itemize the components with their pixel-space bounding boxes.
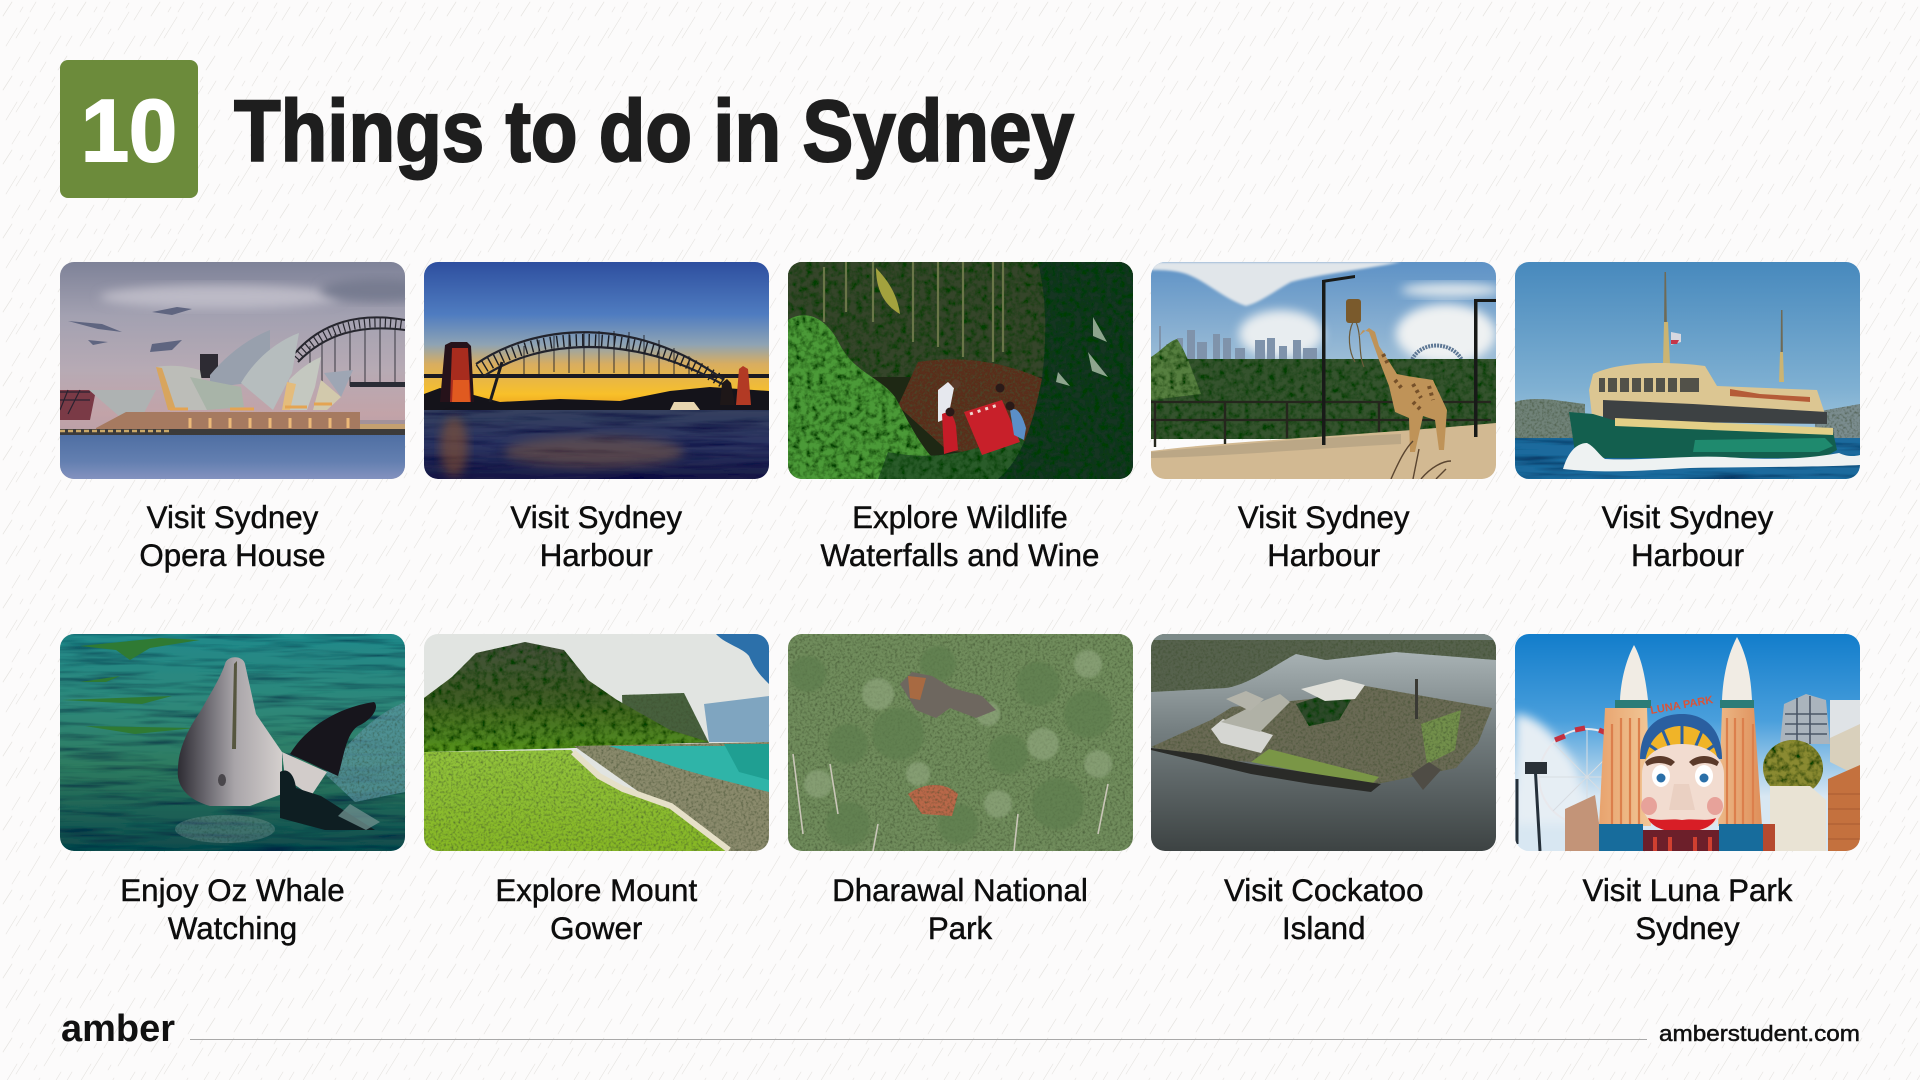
label: Explore Wildlife Waterfalls and Wine: Waterfalls and Wine [821,538,1099,573]
label: Visit Sydney Harbour: Harbour [1267,538,1380,573]
label: Visit Sydney Harbour [1602,500,1774,573]
label: Visit Sydney Opera House: Opera House [139,538,326,573]
photo: Luna Park entrance face [1515,634,1860,851]
label: Visit Sydney Harbour: Harbour [540,538,653,573]
photo: Wildlife park picnic in the forest [788,262,1133,479]
photo: Cockatoo Island aerial [1151,634,1496,851]
label: Dharawal National Park [832,873,1088,946]
label: Visit Sydney Harbour: Visit Sydney [1602,500,1773,535]
label: Explore Mount Gower: Gower [550,911,642,946]
label: Visit Sydney Opera House [139,500,326,573]
photo: Sydney Opera House [60,262,405,479]
logo: amber: amber [61,1008,175,1050]
website: amberstudent.com: amberstudent.com [1659,1021,1860,1046]
label: Visit Sydney Harbour [1238,500,1410,573]
footer rule [190,1039,1647,1040]
label: Visit Luna Park Sydney [1582,873,1793,946]
label: Dharawal National Park: Park [928,911,992,946]
label: Explore Wildlife Waterfalls and Wine [820,500,1099,573]
label: Explore Mount Gower: Explore Mount [495,873,697,908]
number badge: 10 [60,60,198,198]
number badge: 10: 10 [81,81,177,180]
photo: Sydney Harbour Bridge at sunset [424,262,769,479]
label: Explore Mount Gower [495,873,698,946]
label: Visit Luna Park Sydney: Sydney [1635,911,1740,946]
label: Visit Cockatoo Island [1224,873,1423,946]
photo: Dharawal National Park forest [788,634,1133,851]
label: Visit Cockatoo Island: Visit Cockatoo [1224,873,1423,908]
label: Enjoy Oz Whale Watching: Watching [168,911,297,946]
photo: Manly ferry on the harbour [1515,262,1860,479]
label: Visit Sydney Harbour: Visit Sydney [510,500,682,535]
label: Enjoy Oz Whale Watching: Enjoy Oz Whale [120,873,345,908]
label: Visit Sydney Opera House: Visit Sydney [147,500,318,535]
photo: Mount Gower, Lord Howe Island [424,634,769,851]
label: Visit Sydney Harbour [510,500,682,573]
photo: Dolphin in green water [60,634,405,851]
label: Visit Sydney Harbour: Harbour [1631,538,1744,573]
label: Visit Sydney Harbour: Visit Sydney [1238,500,1410,535]
photo: Giraffe with the Sydney skyline [1151,262,1496,479]
label: Explore Wildlife Waterfalls and Wine: Explore Wildlife [852,500,1068,535]
label: Dharawal National Park: Dharawal National [832,873,1088,908]
label: Enjoy Oz Whale Watching [120,873,345,946]
label: Visit Cockatoo Island: Island [1282,911,1366,946]
label: Visit Luna Park Sydney: Visit Luna Park [1583,873,1792,908]
photo: Luna Park entrance face: LUNA PARK [1649,694,1714,717]
